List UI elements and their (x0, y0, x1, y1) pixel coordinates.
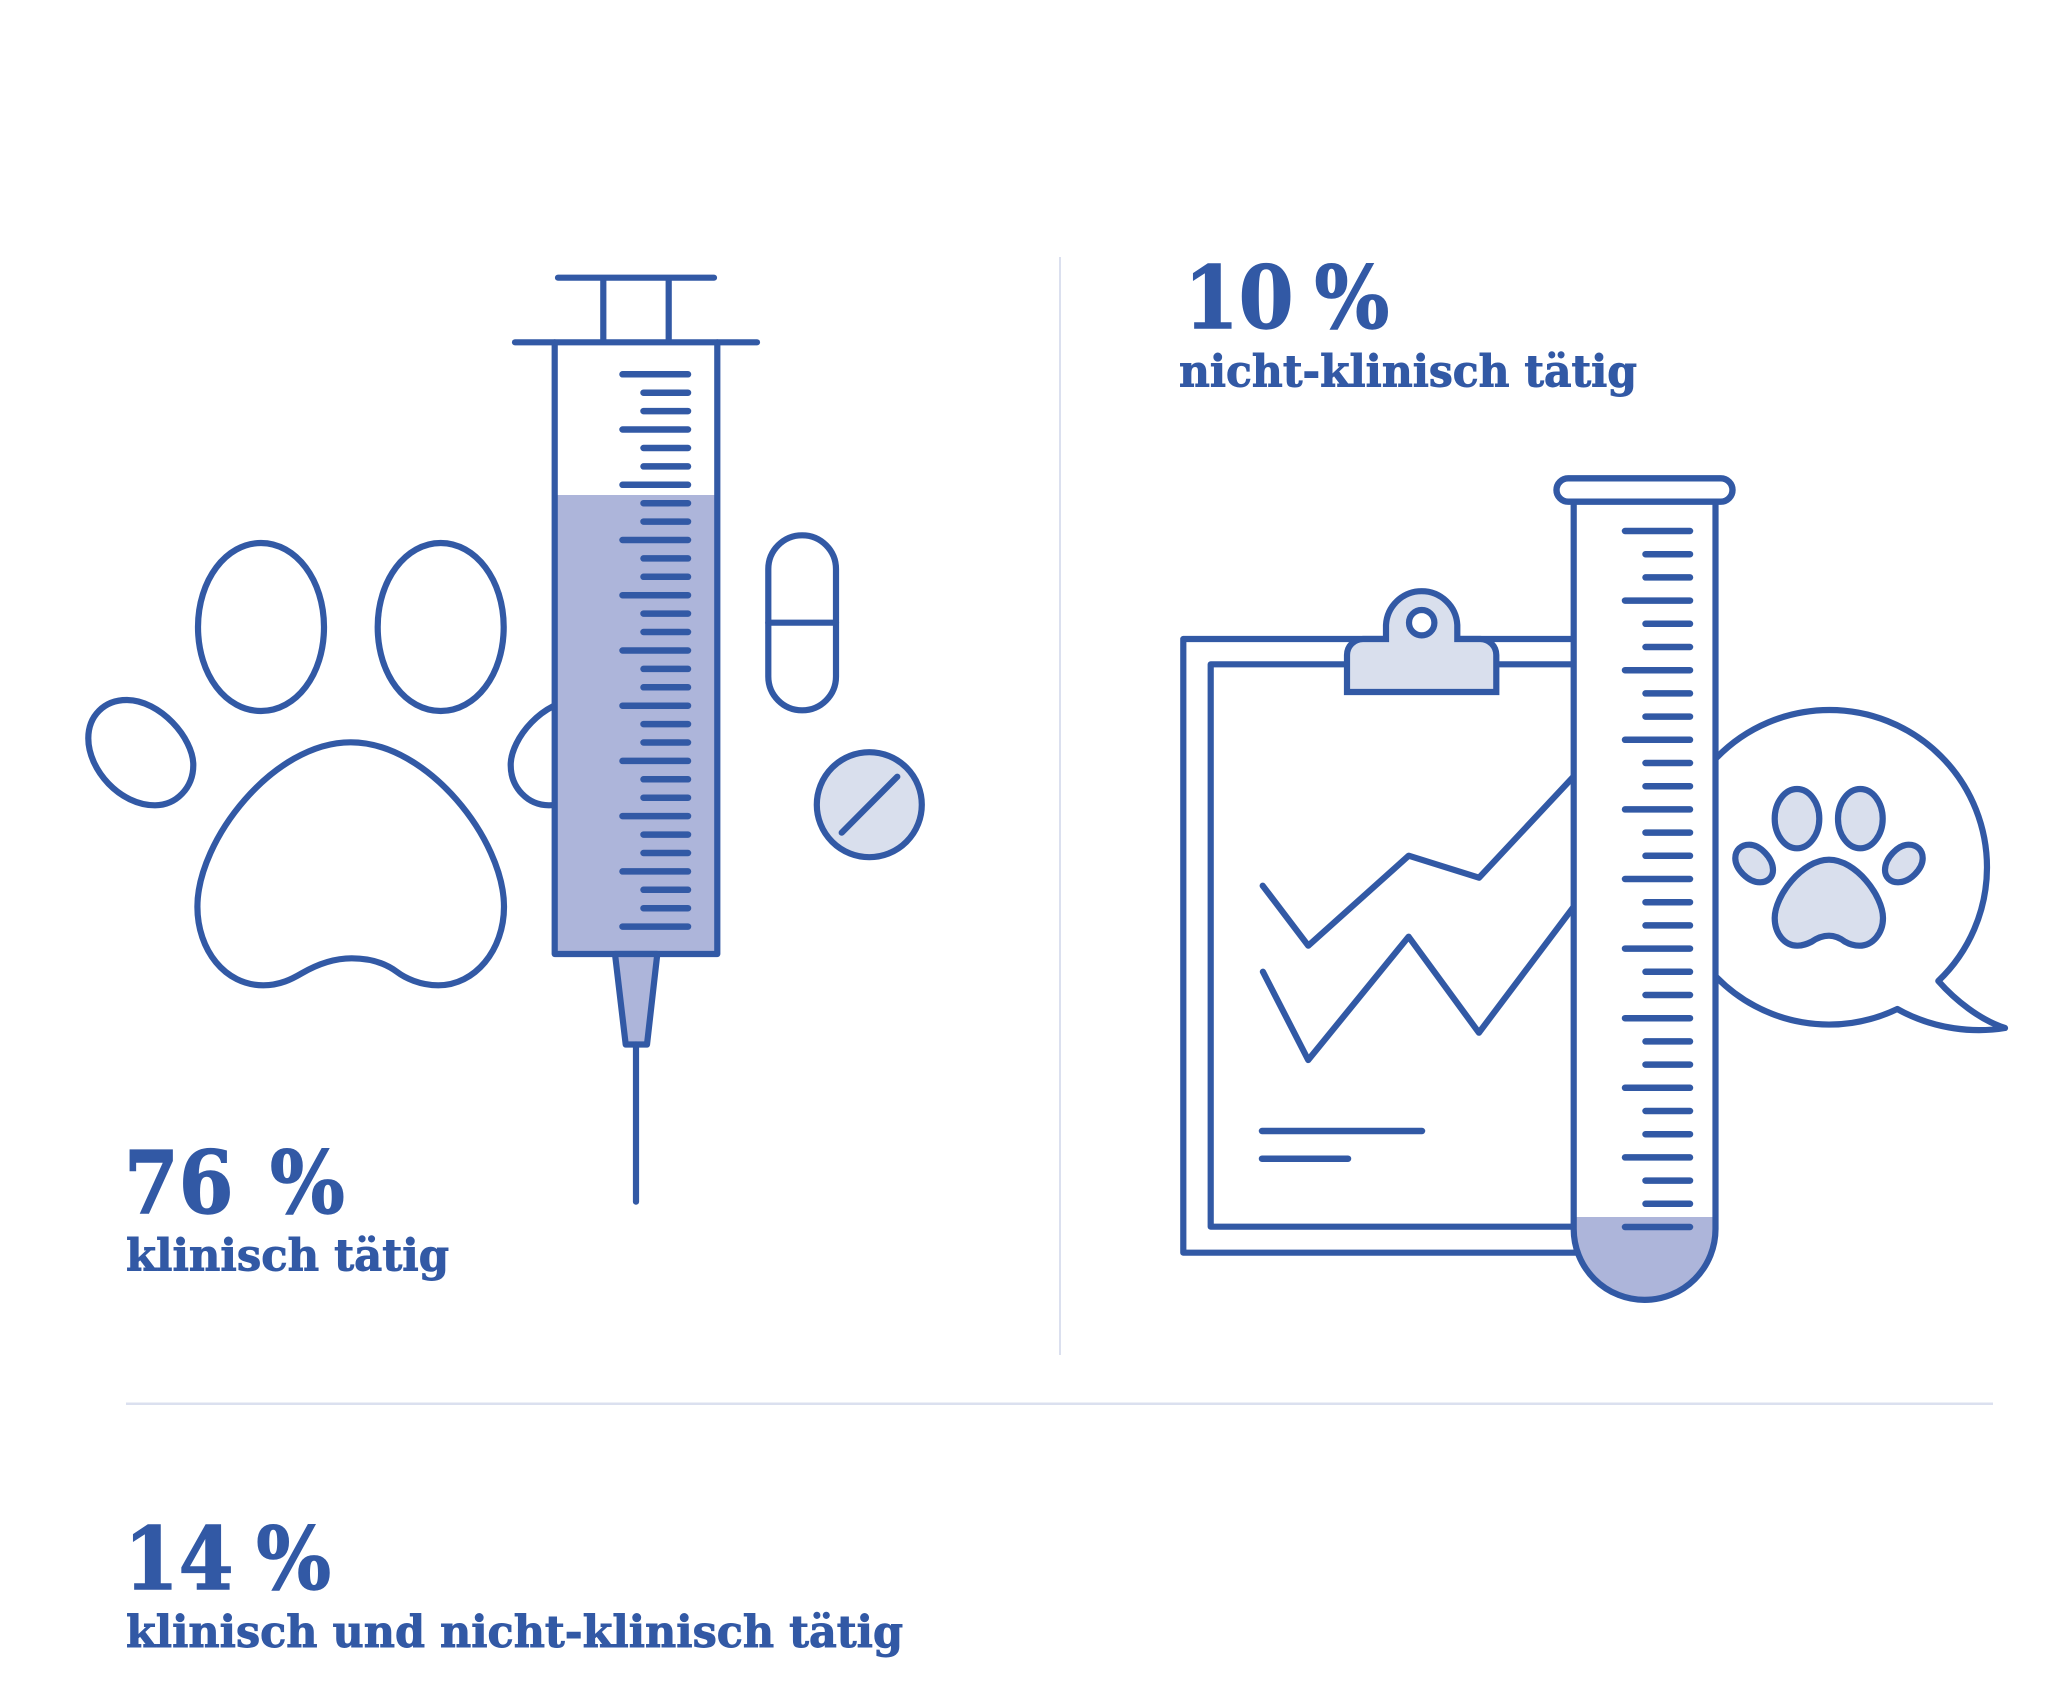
clipboard clip (1347, 591, 1496, 692)
icon: test tube (1556, 478, 1732, 1300)
icon: clipboard with chart (1183, 591, 1580, 1253)
icon: capsule (768, 535, 836, 710)
icon: syringe (515, 278, 757, 1202)
icon: tablet (817, 752, 922, 857)
stat: 10 % nicht-klinisch tätig (1179, 249, 1637, 398)
stat: 10 % nicht-klinisch tätig: 10 % (1184, 249, 1389, 349)
icon: large paw print (88, 543, 616, 985)
stat: 76 % klinisch tätig: 76 % (124, 1134, 345, 1234)
stat: 10 % nicht-klinisch tätig: nicht-klinisch tätig (1179, 347, 1637, 398)
panel: nicht-klinisch tätig illustration (1183, 478, 2005, 1300)
panel: klinisch tätig illustration (88, 278, 922, 1202)
stat: 14 % klinisch und nicht-klinisch tätig: 14 % (124, 1510, 331, 1610)
stat: 76 % klinisch tätig: klinisch tätig (126, 1231, 449, 1282)
stat: 14 % klinisch und nicht-klinisch tätig (124, 1510, 903, 1658)
stat: 14 % klinisch und nicht-klinisch tätig: klinisch und nicht-klinisch tätig (126, 1607, 903, 1658)
icon: speech bubble with paw (1717, 710, 2005, 1030)
stat: 76 % klinisch tätig (124, 1134, 449, 1282)
